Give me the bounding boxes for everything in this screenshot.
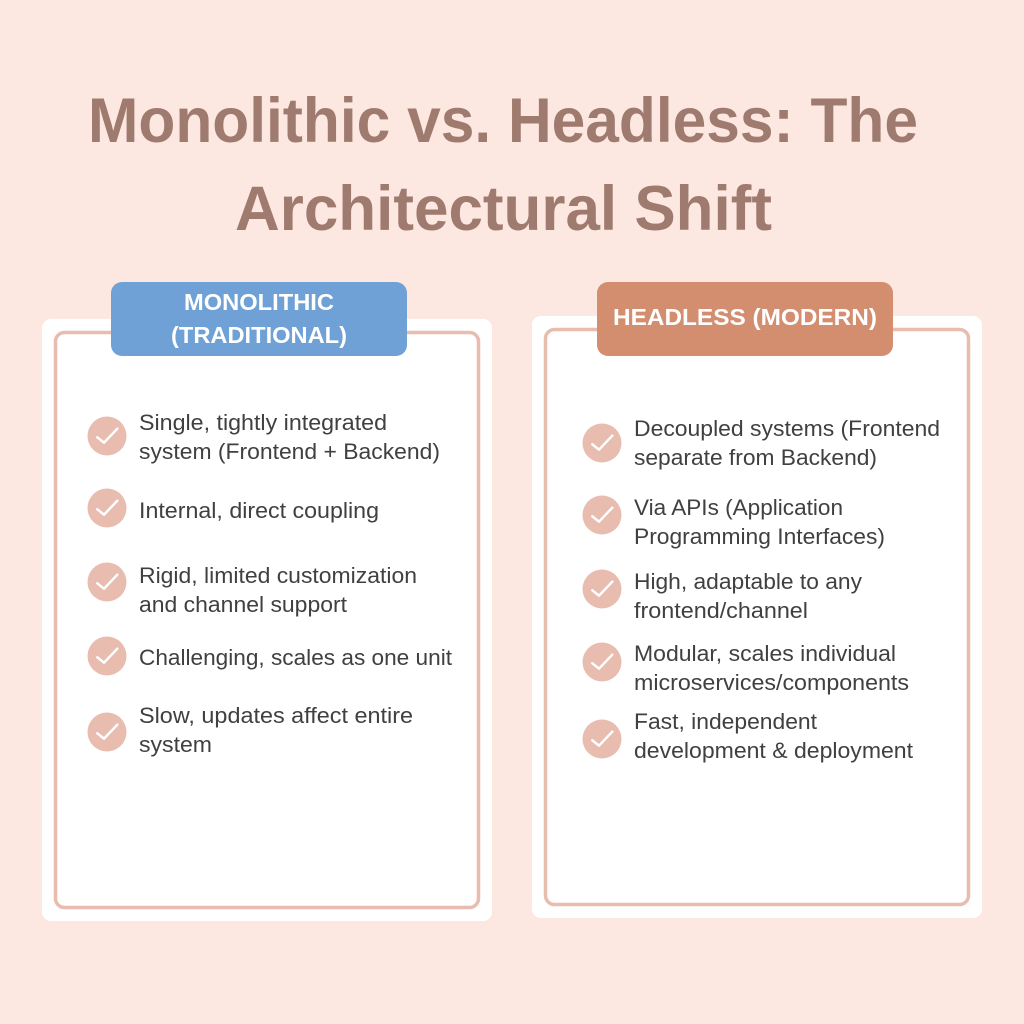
panel: monolithic [42,282,492,921]
item: modular [582,641,909,695]
item: adaptable [582,569,863,623]
item: rigid: and channel support [139,592,348,617]
item: apis: Via APIs (Application [634,495,843,520]
panel: headless [532,282,982,918]
item: slow updates: system [139,732,212,757]
item: adaptable: frontend/channel [634,598,808,623]
item: slow updates: Slow, updates affect entire [139,703,413,728]
item: scaling: Challenging, scales as one unit [139,645,453,670]
item: coupling [88,488,379,528]
monolithic header badge: (TRADITIONAL) [171,322,347,348]
title: Architectural Shift [235,174,772,244]
item: single system [88,410,440,464]
monolithic header badge [111,282,407,356]
item: decoupled: separate from Backend) [634,445,877,470]
item: apis: Programming Interfaces) [634,524,885,549]
title: Monolithic vs. Headless: The [88,86,918,156]
item: modular: microservices/components [634,670,909,695]
item: decoupled [582,416,940,470]
item: scaling [88,636,453,676]
item: modular: Modular, scales individual [634,641,896,666]
item: rigid [88,562,417,617]
item: slow updates [88,703,413,757]
item: apis [582,495,885,549]
item: fast: Fast, independent [634,709,818,734]
item: single system: Single, tightly integrated [139,410,387,435]
item: coupling: Internal, direct coupling [139,498,379,523]
item: fast: development & deployment [634,738,914,763]
item: decoupled: Decoupled systems (Frontend [634,416,940,441]
item: rigid: Rigid, limited customization [139,563,417,588]
monolithic header badge: MONOLITHIC [184,289,334,315]
headless header badge [597,282,893,356]
title [88,86,918,244]
headless header badge: HEADLESS (MODERN) [613,304,877,330]
item: adaptable: High, adaptable to any [634,569,863,594]
item: fast [582,709,914,763]
item: single system: system (Frontend + Backend) [139,439,440,464]
